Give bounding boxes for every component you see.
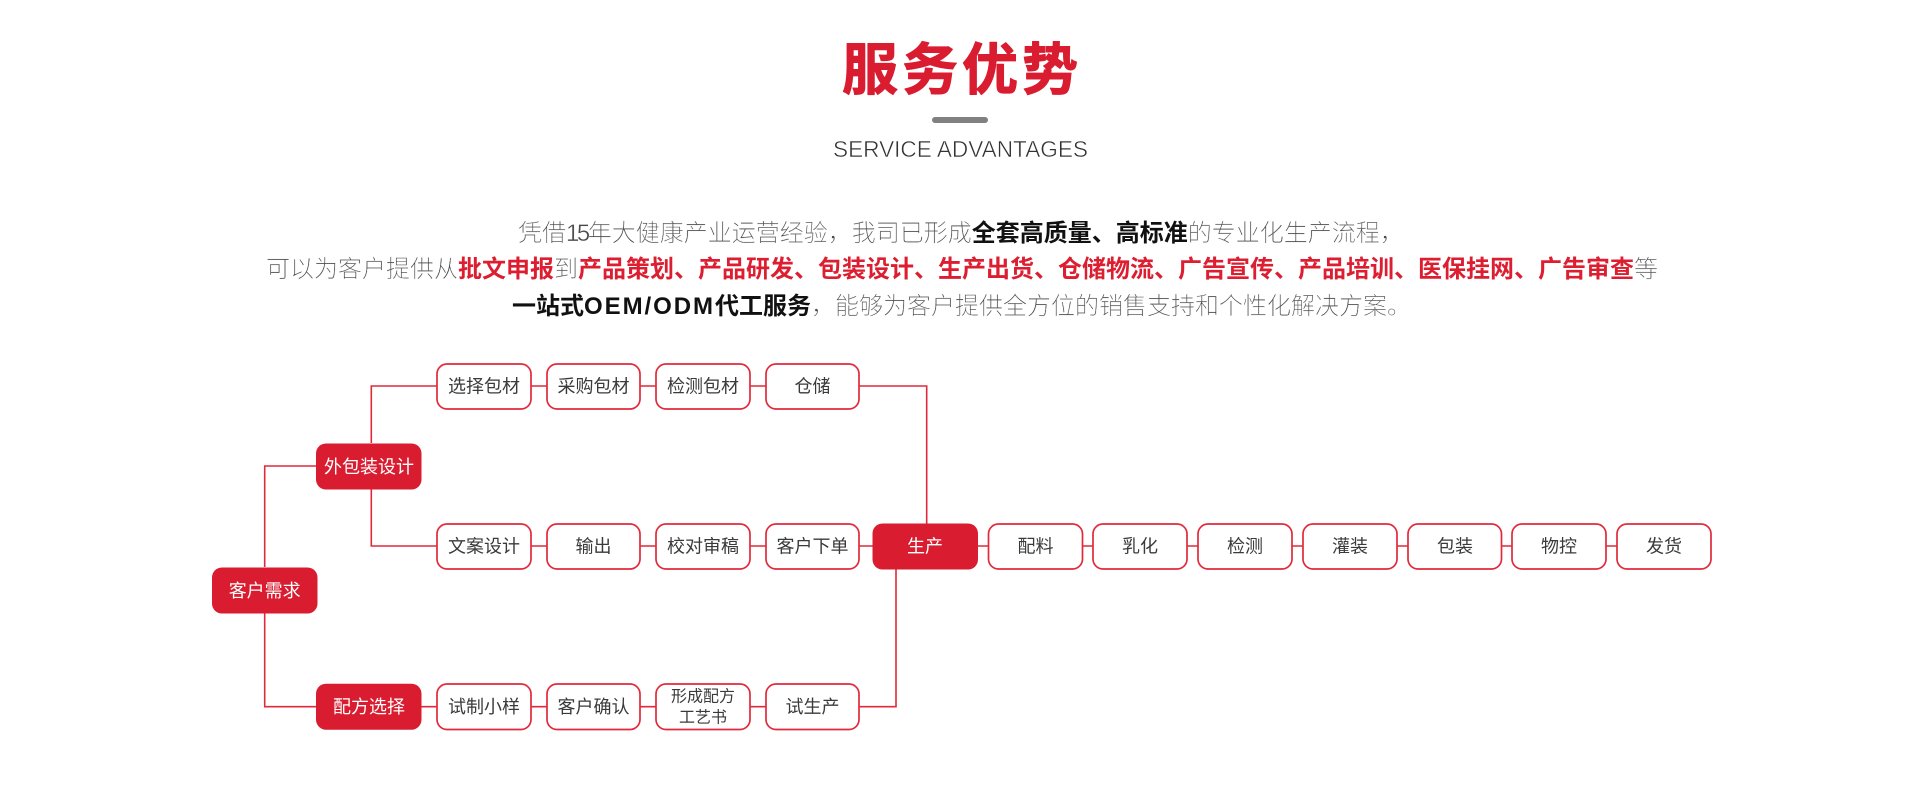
node: 输出 [547, 524, 640, 569]
node: 校对审稿 [656, 524, 750, 569]
node: 发货: 发货 [1646, 536, 1682, 556]
node: 配料: 配料 [1018, 536, 1054, 556]
node: 包装: 包装 [1437, 536, 1473, 556]
title divider bar [932, 117, 988, 123]
node: 客户需求: 客户需求 [229, 581, 301, 601]
node: 配方选择 [316, 684, 422, 730]
node: 试生产: 试生产 [786, 697, 840, 717]
title: 服务优势 [842, 38, 1082, 102]
node: 外包装设计: 外包装设计 [324, 457, 414, 477]
node: 灌装 [1303, 524, 1397, 569]
node: 选择包材: 选择包材 [448, 376, 520, 396]
node: 采购包材: 采购包材 [558, 376, 630, 396]
node: 配料 [988, 524, 1082, 569]
node: 文案设计: 文案设计 [448, 536, 520, 556]
node: 仓储: 仓储 [794, 376, 830, 396]
node: 乳化: 乳化 [1122, 536, 1158, 556]
node: 客户下单 [766, 524, 859, 569]
node: 客户需求 [212, 568, 318, 614]
node: 形成配方工艺书: 形成配方 [671, 688, 735, 706]
node: 输出: 输出 [576, 536, 612, 556]
node: 客户下单: 客户下单 [776, 536, 848, 556]
node: 生产: 生产 [907, 536, 943, 556]
node: 检测 [1198, 524, 1292, 569]
node: 客户确认 [547, 684, 640, 730]
node: 形成配方工艺书: 工艺书 [679, 708, 727, 726]
node: 乳化 [1093, 524, 1187, 569]
node: 生产 [872, 524, 978, 570]
node: 检测包材: 检测包材 [667, 376, 739, 396]
subtitle: SERVICE ADVANTAGES [833, 136, 1088, 162]
node: 校对审稿: 校对审稿 [667, 536, 739, 556]
node: 外包装设计 [316, 444, 422, 490]
intro line 3: 一站式OEM/ODM代工服务，能够为客户提供全方位的销售支持和个性化解决方案。 [512, 293, 1411, 320]
node: 试制小样 [437, 684, 531, 730]
node: 检测包材 [656, 364, 750, 409]
node: 仓储 [766, 364, 859, 409]
node: 灌装: 灌装 [1332, 536, 1368, 556]
intro line 1: 凭借15年大健康产业运营经验，我司已形成全套高质量、高标准的专业化生产流程， [518, 220, 1404, 247]
node: 配方选择: 配方选择 [333, 697, 405, 717]
node: 包装 [1408, 524, 1502, 569]
node: 试生产 [766, 684, 859, 730]
node: 文案设计 [437, 524, 531, 569]
node: 选择包材 [437, 364, 531, 409]
node: 物控 [1512, 524, 1606, 569]
node: 检测: 检测 [1227, 536, 1263, 556]
node: 客户确认: 客户确认 [558, 697, 630, 717]
node: 物控: 物控 [1541, 536, 1577, 556]
flow connectors [265, 386, 1617, 707]
node: 采购包材 [547, 364, 640, 409]
intro paragraph [266, 220, 1658, 320]
node: 形成配方工艺书 [656, 684, 750, 730]
node: 试制小样: 试制小样 [448, 697, 520, 717]
intro line 2: 可以为客户提供从批文申报到产品策划、产品研发、包装设计、生产出货、仓储物流、广告宣传、产品培训、医保挂网、广告审查等 [266, 255, 1658, 283]
node: 发货 [1617, 524, 1711, 569]
